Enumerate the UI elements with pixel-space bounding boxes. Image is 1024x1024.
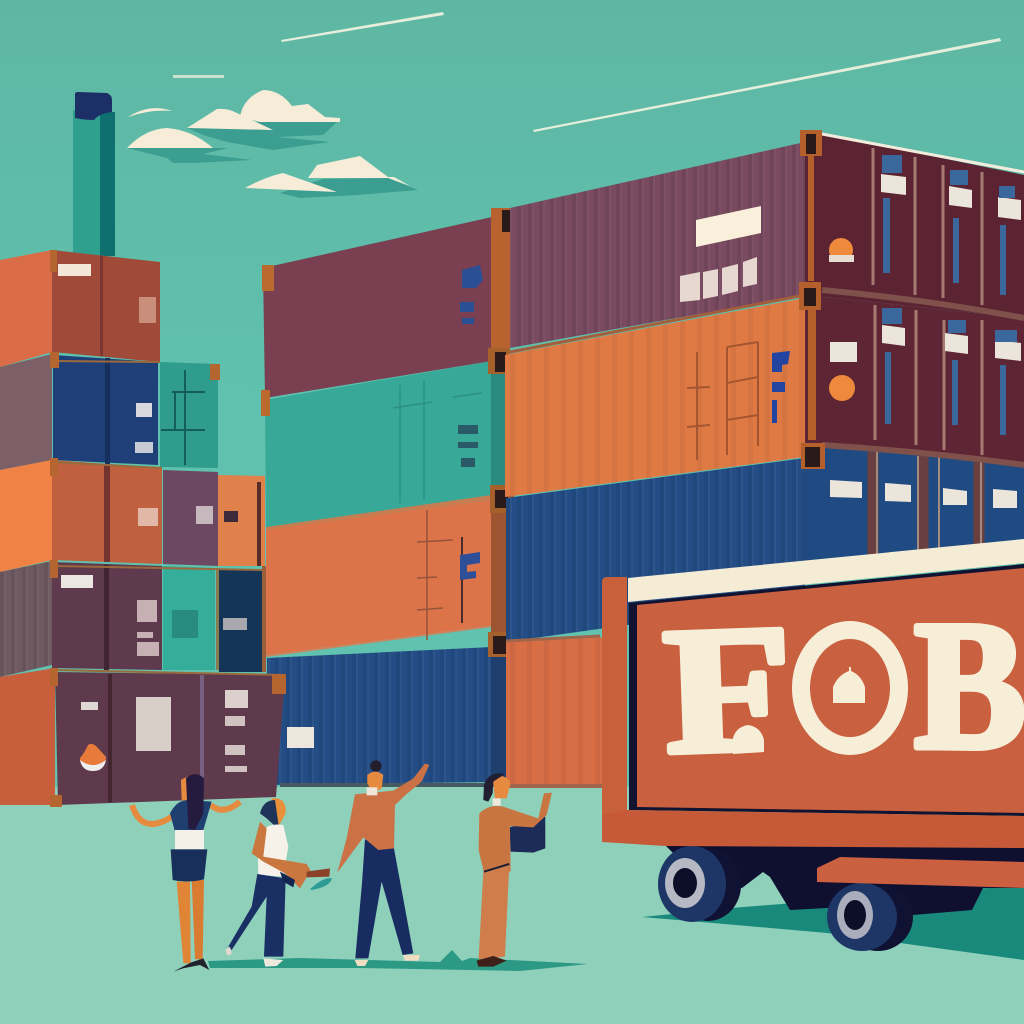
orange container [505, 298, 805, 497]
blue door posts [873, 452, 979, 560]
rust rails [52, 361, 285, 675]
truck post [602, 577, 627, 815]
maroon container [263, 217, 492, 398]
FOB lettering [661, 583, 1024, 791]
lower orange container [506, 637, 610, 785]
person 1 [132, 774, 240, 972]
teal door lines [393, 381, 482, 503]
blue container [267, 647, 492, 785]
row 4 [0, 561, 52, 677]
row 3 [0, 460, 52, 572]
purple stencil [680, 257, 757, 302]
blue marks [772, 351, 790, 423]
dot dome [733, 725, 764, 754]
background sky [0, 0, 1024, 800]
maroon doors upper [805, 130, 1024, 318]
teal markings [458, 425, 478, 467]
person 3 [337, 760, 429, 966]
orange logo [80, 744, 106, 770]
truck [602, 539, 1024, 951]
container stack: right side faces [280, 142, 805, 788]
person 4 [477, 773, 552, 967]
container stack: center [261, 208, 514, 785]
left corner castings [261, 265, 274, 416]
ground shadow under people [208, 950, 588, 971]
chimney [73, 92, 115, 256]
blue doors [805, 445, 1024, 570]
wheel rear left [658, 846, 741, 922]
door blue strips [882, 155, 1017, 435]
purple label [696, 206, 761, 247]
row 5 [0, 668, 55, 805]
center column [491, 208, 510, 348]
blue container [506, 458, 805, 642]
horizontal rails [822, 290, 1024, 465]
round logos [829, 238, 853, 262]
cloud shadows [127, 122, 418, 198]
wheel rear right [827, 883, 913, 951]
maroon doors middle [805, 295, 1024, 462]
letter O ring [792, 621, 908, 755]
orange container [266, 500, 492, 655]
clouds [127, 90, 418, 198]
truck shadow [642, 885, 1024, 960]
truck lower beam [602, 810, 1024, 848]
orange doors [687, 342, 758, 460]
top edge [822, 134, 1024, 172]
purple container [510, 142, 805, 348]
castings [50, 250, 286, 807]
person 2 [225, 798, 332, 967]
truck white roof strip [628, 539, 1024, 602]
row 1 [0, 250, 52, 367]
container stack: left [0, 250, 286, 807]
door labels [830, 174, 1021, 508]
step bumper [817, 857, 1024, 888]
teal container [265, 361, 492, 528]
ground [0, 787, 1024, 1024]
container stack: right end doors [799, 130, 1024, 570]
door posts [873, 148, 982, 455]
corner castings [799, 130, 825, 469]
chassis [665, 845, 1024, 915]
blue mark [460, 552, 480, 580]
cloud shapes [127, 90, 410, 192]
people group [132, 760, 552, 972]
FOB lettering: F [661, 588, 795, 791]
truck frame [629, 564, 1024, 816]
sky streaks [173, 12, 1001, 132]
O dome [833, 667, 865, 703]
row 2 [0, 354, 52, 470]
blue markings on maroon [460, 265, 483, 324]
orange door marks [417, 510, 462, 640]
truck sign panel [637, 568, 1024, 813]
